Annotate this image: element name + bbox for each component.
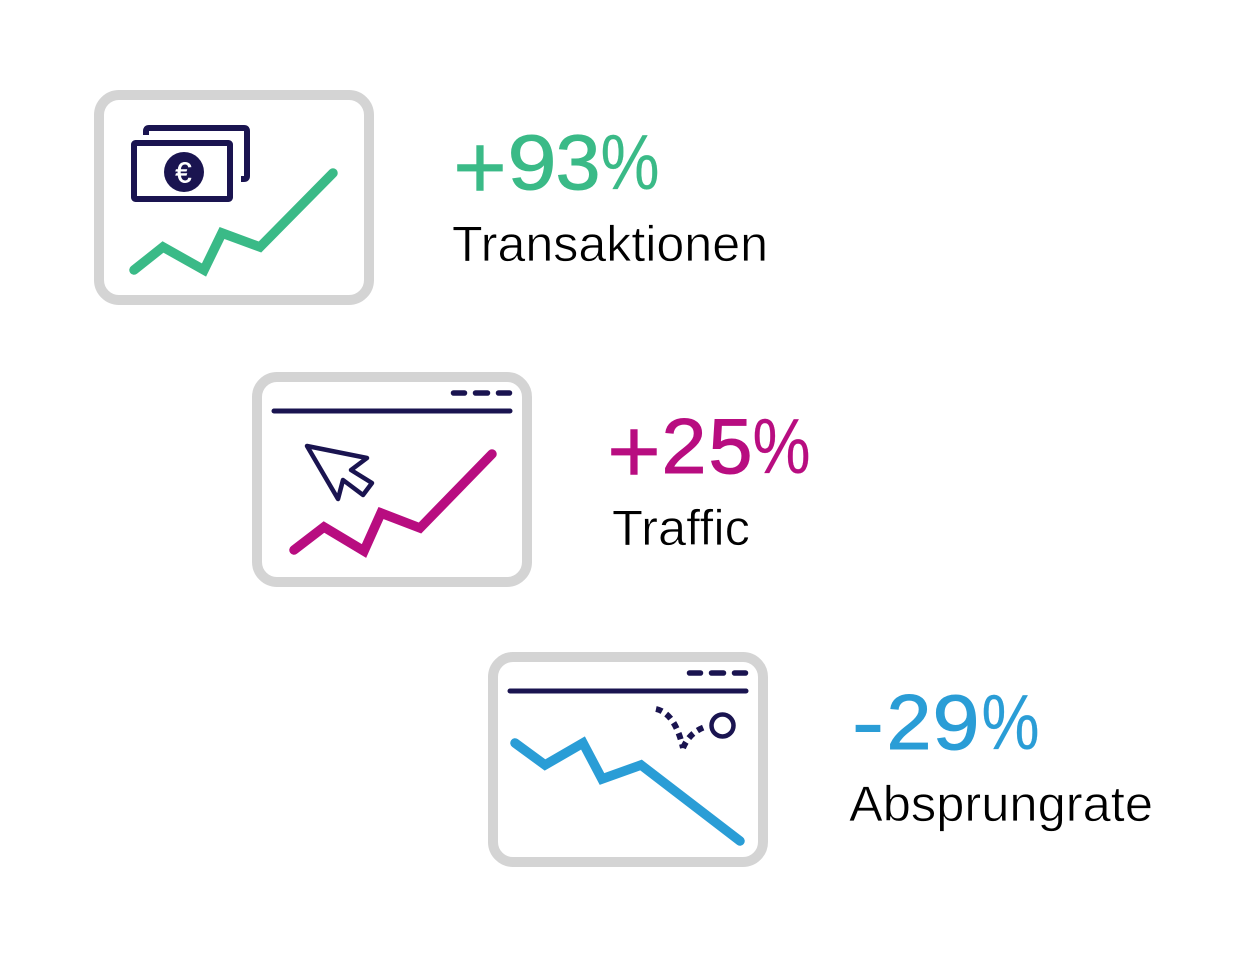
card frame	[99, 95, 369, 300]
value: +25%: +	[607, 400, 661, 502]
value: +25%: 5	[708, 402, 752, 490]
panel: Transaktionen	[99, 95, 768, 300]
icon: money chart card	[99, 95, 369, 300]
card frame	[493, 657, 763, 862]
value: +25%	[607, 400, 810, 502]
icon: euro coin: €	[175, 158, 192, 190]
icon: front banknote	[134, 143, 230, 199]
icon: bounce path	[656, 709, 734, 748]
value: -29%: %	[982, 678, 1040, 766]
value: +93%: 9	[508, 118, 556, 206]
value: +93%: 3	[556, 118, 600, 206]
value: +25%: 2	[662, 402, 706, 490]
panel: Absprungrate	[493, 657, 1153, 862]
value: +93%	[453, 116, 660, 218]
browser window dashes	[690, 670, 746, 676]
label: Transaktionen: Transaktionen	[452, 216, 768, 272]
browser window dashes	[454, 390, 510, 396]
line chart: rising magenta	[294, 454, 492, 551]
value: -29%	[852, 678, 1040, 766]
card frame	[257, 377, 527, 582]
value: -29%: 9	[932, 678, 980, 766]
value: +25%: %	[752, 402, 810, 490]
line chart: falling blue	[515, 743, 740, 841]
value: -29%: 2	[886, 678, 932, 766]
icon: back banknote	[146, 128, 247, 179]
line chart: rising green	[134, 173, 333, 270]
value: +93%: +	[453, 116, 507, 218]
icon: mouse cursor	[307, 446, 372, 499]
icon: browser bounce card	[493, 657, 763, 862]
icon: euro coin	[164, 152, 204, 192]
browser header line	[510, 688, 746, 694]
browser header line	[274, 408, 510, 414]
label: Traffic: Traffic	[612, 500, 750, 556]
value: +93%: %	[600, 118, 660, 206]
value: -29%: -	[852, 678, 884, 766]
panel: Traffic	[257, 377, 810, 582]
label: Absprungrate: Absprungrate	[849, 776, 1153, 832]
icon: browser chart card	[257, 377, 527, 582]
